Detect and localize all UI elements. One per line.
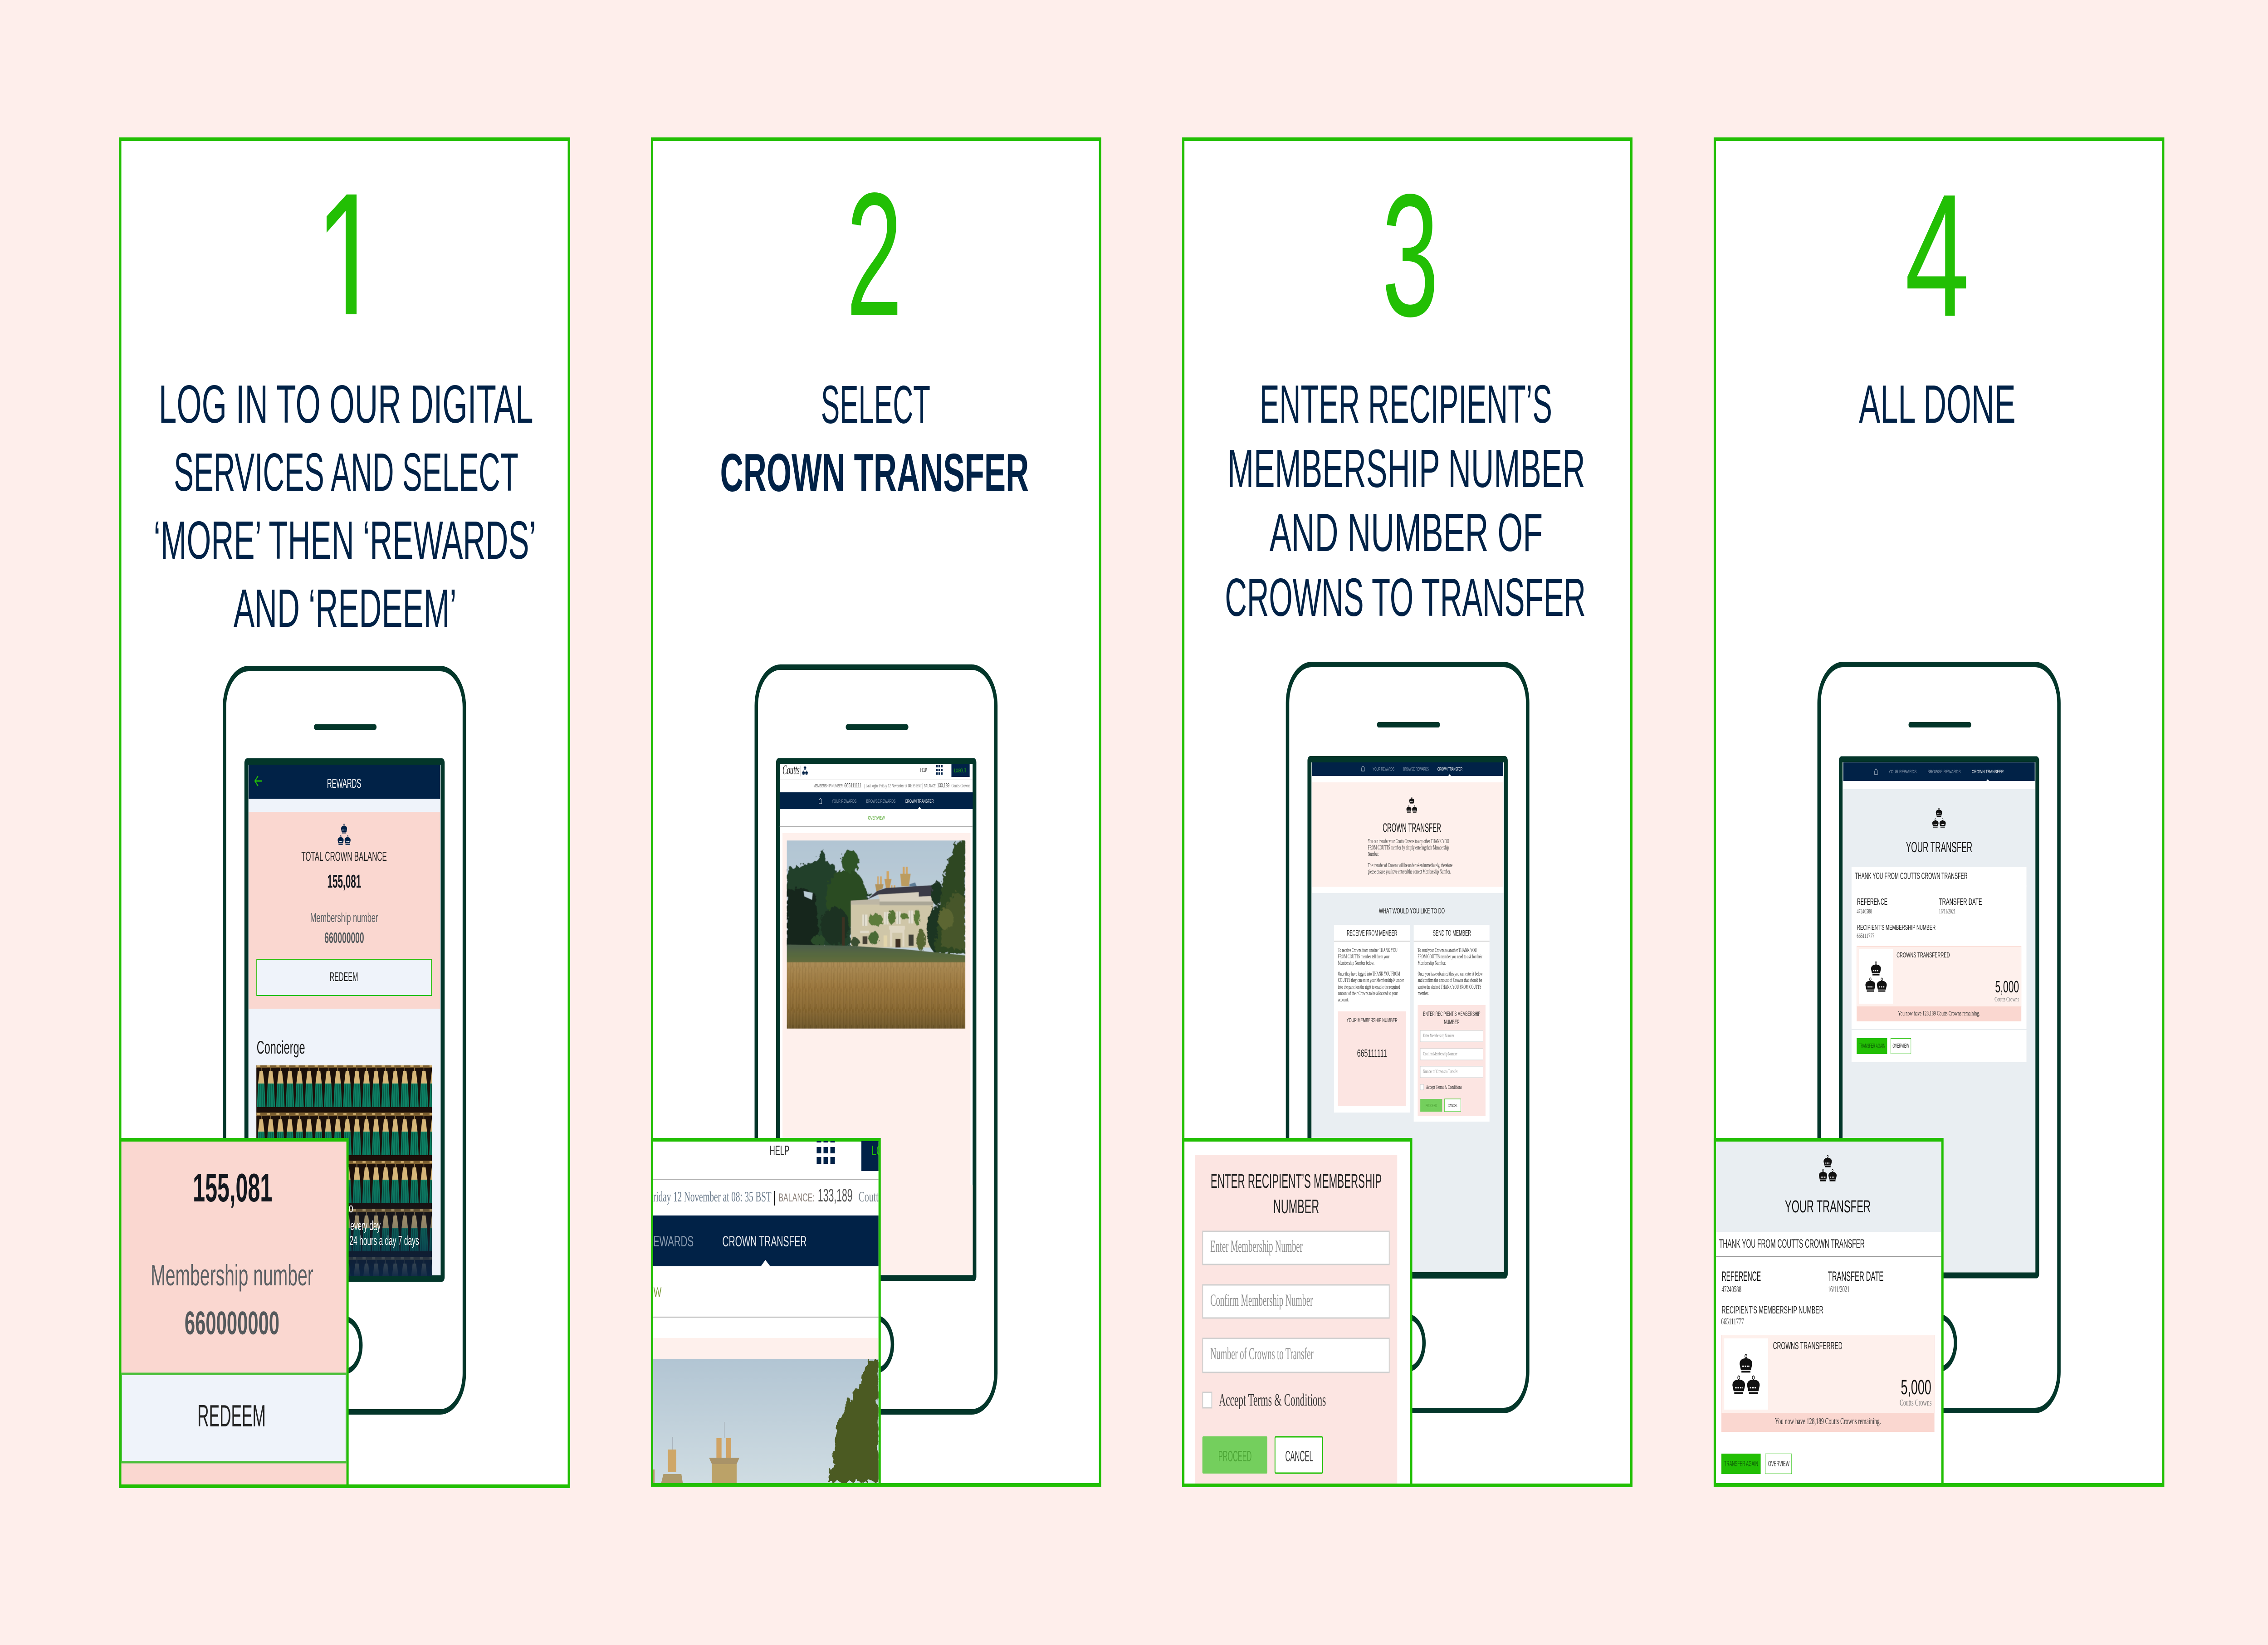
card: receive from member: To receive Crowns from another THANK YOU	[1338, 947, 1398, 954]
step number 2: 2	[846, 156, 902, 353]
navigation bar	[1312, 762, 1503, 776]
card: send to member: CANCEL	[1448, 1103, 1458, 1108]
card: send to member: Accept Terms & Conditions	[1426, 1084, 1462, 1091]
inset: balance zoom: 660000000	[185, 1305, 279, 1342]
intro block	[1312, 782, 1503, 887]
concierge card	[256, 1038, 432, 1276]
heading: step 1: SERVICES AND SELECT	[174, 442, 518, 503]
phone screen: your transfer	[1841, 759, 2037, 1275]
inset: recipient form zoom: Accept Terms & Conditions	[1219, 1390, 1326, 1409]
card: receive from member: Membership Number below.	[1338, 960, 1374, 966]
card: send to member: Membership Number.	[1418, 960, 1446, 966]
transfer receipt card: OVERVIEW	[1892, 1043, 1909, 1049]
card: receive from member: amount of their Crowns to be allocated to your	[1338, 990, 1398, 997]
inset: crown transfer tab zoom: EWARDS	[653, 1233, 694, 1250]
options block	[1312, 893, 1503, 1272]
card: send to member: Number of Crowns to Transfer	[1423, 1069, 1458, 1075]
inset: crown transfer tab zoom: BALANCE:	[778, 1191, 815, 1204]
inset: recipient form zoom: NUMBER	[1273, 1195, 1319, 1218]
transfer receipt card: CROWNS TRANSFERRED	[1897, 951, 1950, 959]
intro block: please ensure you have entered the correct Membership Number.	[1368, 868, 1451, 875]
navigation bar	[780, 792, 973, 809]
inset: balance zoom: 155,081	[193, 1165, 272, 1210]
transfer area: YOUR TRANSFER	[1906, 839, 1972, 855]
phone outline: step 2	[756, 667, 996, 1412]
panel: step 2	[652, 139, 1100, 1485]
header bar: REWARDS	[327, 776, 361, 791]
heading: step 1: LOG IN TO OUR DIGITAL	[159, 374, 533, 434]
phone screen: crown transfer form	[1310, 759, 1506, 1275]
photo: country house	[787, 840, 965, 1029]
heading: step 2: SELECT	[821, 375, 930, 435]
membership info line	[814, 782, 970, 789]
inset: balance zoom	[120, 1140, 347, 1486]
button: transfer again	[1721, 1454, 1761, 1474]
heading: step 2: CROWN TRANSFER	[720, 443, 1029, 503]
membership info line: MEMBERSHIP NUMBER:	[814, 783, 843, 788]
inset: transfer receipt zoom: 16/11/2021	[1828, 1284, 1849, 1294]
panel: step 3	[1183, 139, 1631, 1485]
card: receive from member: Once they have logged into THANK YOU FROM	[1338, 971, 1400, 977]
navigation bar: BROWSE REWARDS	[1928, 769, 1960, 774]
step number 4: 4	[1905, 158, 1970, 353]
navigation bar: BROWSE REWARDS	[1403, 766, 1429, 771]
inset: balance zoom: REDEEM	[197, 1399, 266, 1434]
transfer receipt card	[1852, 867, 2026, 1062]
step number 1: 1	[315, 152, 383, 371]
transfer receipt card: RECIPIENT’S MEMBERSHIP NUMBER	[1857, 923, 1936, 932]
top bar	[780, 763, 973, 780]
inset: transfer receipt zoom: THANK YOU FROM COUTTS CROWN TRANSFER	[1719, 1237, 1865, 1250]
card: receive from member: account.	[1338, 996, 1349, 1003]
inset: transfer receipt zoom	[1715, 1140, 1942, 1485]
photo: country house crop	[653, 1359, 879, 1483]
inset: recipient form zoom: Number of Crowns to Transfer	[1210, 1344, 1314, 1363]
card: send to member	[1414, 925, 1490, 1122]
navigation bar: YOUR REWARDS	[1373, 766, 1394, 771]
crown balance block: Membership number	[310, 911, 378, 925]
phone outline: step 4	[1819, 664, 2059, 1411]
membership info line: Coutts Crowns	[951, 783, 970, 789]
navigation bar: YOUR REWARDS	[832, 798, 856, 804]
transfer receipt card: REFERENCE	[1857, 897, 1887, 907]
card: send to member: ENTER RECIPIENT’S MEMBERSHIP	[1423, 1010, 1481, 1018]
inset: crown transfer tab zoom: riday 12 November at 08: 35 BST	[653, 1188, 772, 1205]
inset: crown transfer tab zoom: 133,189	[818, 1186, 853, 1206]
concierge card: o	[349, 1201, 353, 1215]
top bar: LOGOUT	[954, 768, 966, 774]
membership info line: 665111111	[844, 782, 861, 789]
inset: crown transfer tab zoom: HELP	[770, 1143, 789, 1158]
card: send to member: FROM COUTTS member you need to ask for their	[1418, 953, 1482, 960]
card: receive from member	[1334, 925, 1410, 1113]
heading: step 3: ENTER RECIPIENT’S	[1260, 374, 1552, 434]
inset: crown transfer tab zoom: W	[654, 1285, 662, 1300]
transfer receipt card: TRANSFER DATE	[1939, 897, 1982, 907]
navigation bar	[1843, 762, 2035, 781]
heading: step 4: ALL DONE	[1859, 374, 2016, 434]
pale content area	[780, 833, 973, 1275]
phone outline: step 1	[225, 669, 464, 1412]
transfer receipt card: 665111777	[1857, 932, 1874, 940]
concierge card: Concierge	[257, 1038, 305, 1058]
button: overview: OVERVIEW	[1768, 1459, 1789, 1469]
transfer receipt card: Coutts Crowns	[1994, 996, 2019, 1003]
top bar: HELP	[920, 767, 927, 774]
transfer receipt card: 16/11/2021	[1939, 908, 1955, 915]
concierge card: every day	[350, 1219, 381, 1233]
card: receive from member: YOUR MEMBERSHIP NUMBER	[1346, 1017, 1398, 1024]
card: send to member: NUMBER	[1444, 1019, 1460, 1026]
crown balance block	[249, 812, 440, 1009]
button: transfer again: TRANSFER AGAIN	[1724, 1459, 1758, 1469]
inset: crown transfer tab zoom: Coutt	[859, 1188, 879, 1205]
card: send to member: Once you have obtained this you can enter it below	[1418, 971, 1483, 977]
card: send to member: SEND TO MEMBER	[1433, 928, 1471, 938]
inset: transfer receipt zoom: TRANSFER DATE	[1828, 1269, 1883, 1284]
transfer receipt card: 5,000	[1995, 978, 2019, 996]
inset: transfer receipt zoom: You now have 128,189 Coutts Crowns remaining.	[1775, 1416, 1881, 1426]
phone screen: rewards	[246, 761, 443, 1279]
transfer area	[1843, 789, 2035, 1272]
heading: step 3: AND NUMBER OF	[1270, 503, 1543, 563]
intro block: CROWN TRANSFER	[1383, 821, 1441, 835]
heading: step 1	[153, 374, 536, 639]
card: receive from member: into the panel on the right to enable the required	[1338, 984, 1400, 991]
inset: transfer receipt zoom: YOUR TRANSFER	[1785, 1196, 1871, 1216]
inset: transfer receipt zoom: Coutts Crowns	[1900, 1397, 1931, 1408]
heading: step 3	[1225, 374, 1586, 628]
panel: step 1	[120, 139, 569, 1486]
transfer receipt card: You now have 128,189 Coutts Crowns remaining.	[1898, 1010, 1980, 1017]
inset: transfer receipt zoom: REFERENCE	[1722, 1269, 1761, 1284]
inset: transfer receipt zoom: RECIPIENT’S MEMBERSHIP NUMBER	[1722, 1305, 1823, 1316]
options block: WHAT WOULD YOU LIKE TO DO	[1379, 907, 1445, 916]
membership info line: | Last login: Friday 12 November at 08: 35 BST	[864, 783, 922, 789]
button: proceed	[1202, 1436, 1267, 1474]
inset: balance zoom: Membership number	[151, 1259, 313, 1292]
inset: recipient form zoom	[1183, 1140, 1411, 1485]
overview tab: OVERVIEW	[868, 815, 885, 820]
card: send to member: member.	[1418, 990, 1429, 997]
intro block: The transfer of Crowns will be undertaken immediately, therefore	[1368, 862, 1452, 869]
panel: step 4	[1715, 139, 2163, 1485]
top bar: Coutts	[782, 763, 800, 777]
button: cancel	[1275, 1437, 1323, 1473]
navigation bar: CROWN TRANSFER	[1437, 766, 1462, 771]
inset: crown transfer tab zoom	[652, 1140, 883, 1485]
intro block: Number.	[1368, 850, 1379, 858]
inset: transfer receipt zoom: 47240588	[1722, 1284, 1741, 1294]
card: send to member: Confirm Membership Number	[1423, 1051, 1457, 1057]
heading: step 3: CROWNS TO TRANSFER	[1225, 567, 1586, 628]
inset: crown transfer tab zoom: CROWN TRANSFER	[723, 1233, 807, 1250]
heading: step 3: MEMBERSHIP NUMBER	[1227, 439, 1585, 499]
card: receive from member: 665111111	[1357, 1048, 1387, 1059]
crown balance block: REDEEM	[330, 970, 358, 984]
membership info line: BALANCE:	[924, 783, 936, 788]
crown balance block: TOTAL CROWN BALANCE	[301, 849, 387, 864]
transfer receipt card: TRANSFER AGAIN	[1859, 1043, 1885, 1049]
card: send to member: Enter Membership Number	[1423, 1033, 1454, 1039]
card: send to member: PROCEED	[1426, 1103, 1437, 1108]
card: receive from member: COUTTS they can enter your Membership Number	[1338, 977, 1404, 984]
inset: transfer receipt zoom: 665111777	[1721, 1316, 1744, 1327]
navigation bar: BROWSE REWARDS	[866, 798, 895, 804]
button: overview	[1765, 1454, 1792, 1474]
heading: step 2	[720, 375, 1029, 503]
button: cancel: CANCEL	[1285, 1448, 1313, 1464]
crown balance block: 155,081	[327, 871, 361, 892]
inset: transfer receipt zoom: 5,000	[1901, 1376, 1931, 1399]
inset: transfer receipt zoom: CROWNS TRANSFERRED	[1773, 1341, 1843, 1352]
navigation bar: CROWN TRANSFER	[905, 798, 934, 804]
inset: recipient form zoom: Confirm Membership Number	[1210, 1290, 1313, 1309]
inset: recipient form zoom: Enter Membership Number	[1210, 1236, 1303, 1255]
heading: step 1: AND ‘REDEEM’	[234, 578, 457, 639]
card: receive from member: RECEIVE FROM MEMBER	[1347, 928, 1397, 938]
card: send to member: To send your Crowns to another THANK YOU	[1418, 947, 1477, 954]
inset: recipient form zoom: ENTER RECIPIENT’S MEMBERSHIP	[1211, 1170, 1382, 1192]
concierge card: 24 hours a day 7 days	[350, 1234, 419, 1248]
phone screen: overview	[778, 761, 974, 1278]
transfer receipt card: THANK YOU FROM COUTTS CROWN TRANSFER	[1855, 871, 1967, 881]
navigation bar: YOUR REWARDS	[1889, 769, 1916, 774]
header bar	[249, 765, 440, 799]
intro block: You can transfer your Coutts Crowns to any other THANK YOU	[1368, 838, 1449, 845]
button: proceed: PROCEED	[1218, 1448, 1251, 1464]
inset: crown transfer tab zoom: LO	[871, 1143, 883, 1158]
transfer receipt card: 47240588	[1857, 908, 1872, 915]
intro block: FROM COUTTS member by simply entering their Membership	[1368, 844, 1449, 851]
crown balance block: 660000000	[324, 929, 364, 946]
step number 3: 3	[1382, 158, 1439, 353]
membership info line: 133,189	[937, 782, 949, 789]
card: receive from member: FROM COUTTS member tell them your	[1338, 953, 1390, 960]
navigation bar: CROWN TRANSFER	[1972, 769, 2004, 774]
card: send to member: and confirm the amount of Crowns that should be	[1418, 977, 1482, 984]
card: send to member: sent to the desired THANK YOU FROM COUTTS	[1418, 984, 1481, 991]
phone outline: step 3	[1287, 664, 1528, 1411]
heading: step 1: ‘MORE’ THEN ‘REWARDS’	[153, 510, 536, 571]
